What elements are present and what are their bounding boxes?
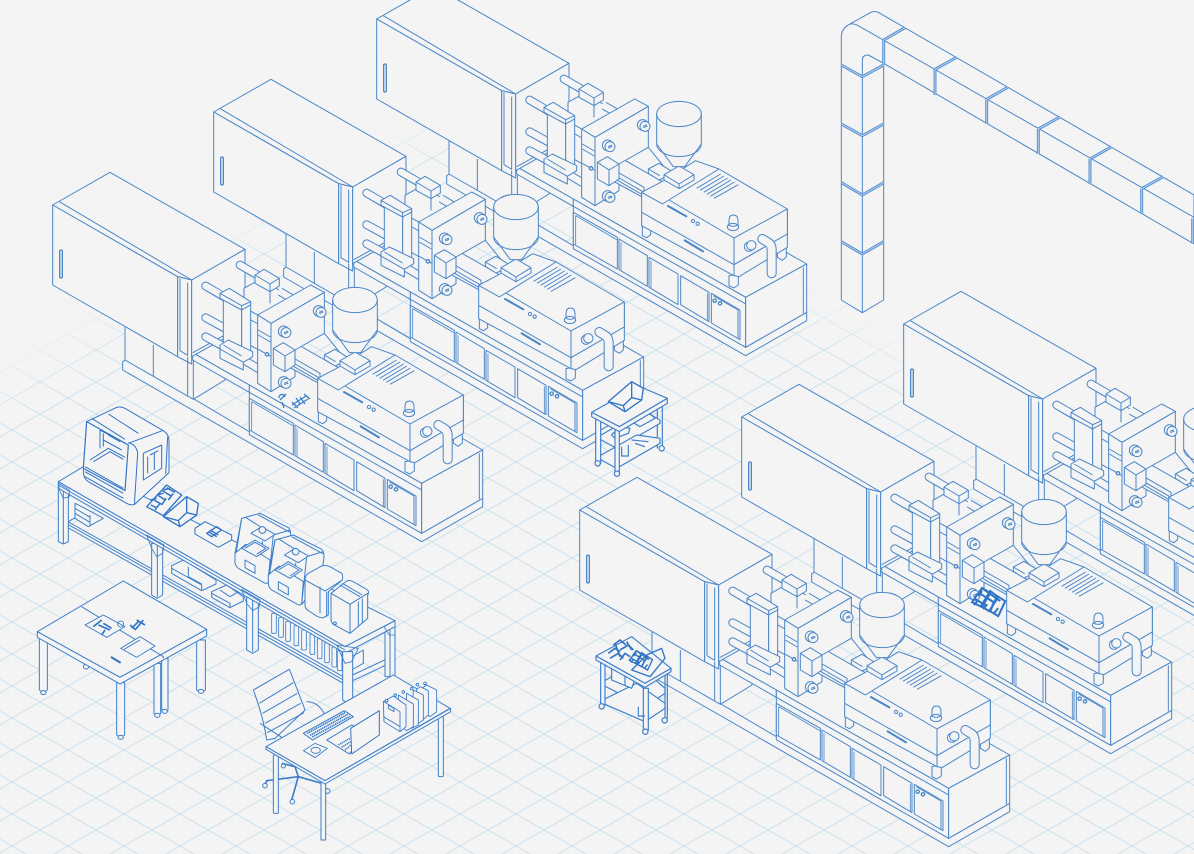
front leg [343, 652, 353, 703]
table legs [39, 637, 205, 739]
build plate part [195, 522, 232, 547]
overhead duct [841, 12, 1194, 313]
desk with chair and laptop [253, 669, 451, 840]
keyboard [303, 711, 353, 740]
desk top [266, 675, 450, 781]
resin tube rack [272, 613, 342, 671]
injection moulding machine, back row middle [214, 79, 644, 449]
injection moulding machine, right row front [580, 477, 1010, 847]
resin printer [83, 407, 198, 527]
workbench with printers [58, 407, 395, 703]
small cart with bin [592, 382, 667, 476]
mouse pad [303, 743, 327, 758]
table top [37, 581, 207, 677]
injection moulding machine, back row front [53, 172, 483, 542]
wash unit [331, 580, 368, 633]
injection moulding machine, right row middle [742, 384, 1172, 754]
leg frames [58, 488, 395, 677]
small cart with parts [596, 637, 671, 734]
injection moulding machine, back row rear [377, 0, 807, 356]
work table [37, 581, 207, 739]
desk legs [273, 717, 443, 840]
office chair [253, 669, 330, 804]
items on table [85, 615, 155, 662]
empty bin [163, 497, 198, 527]
corner brackets [59, 483, 395, 663]
printer pair [235, 513, 368, 633]
parts tray on machine [972, 588, 1005, 616]
bench top [58, 467, 395, 653]
printed parts tray [147, 485, 182, 516]
laptop [327, 711, 379, 754]
injection moulding machine, right row rear [904, 291, 1194, 661]
lower shelf and stored items [65, 503, 392, 683]
loose parts on machine base [279, 394, 310, 408]
sample bottles [383, 682, 437, 732]
curing unit [305, 565, 343, 618]
